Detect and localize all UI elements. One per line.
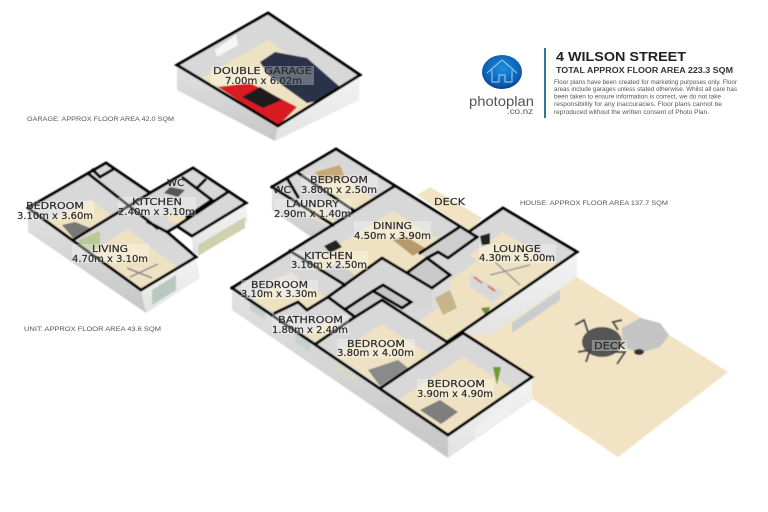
disclaimer text — [554, 79, 737, 116]
room: laundry and wc — [300, 205, 338, 226]
plant — [493, 367, 501, 385]
label: laundry: 2.90m x 1.40m — [274, 209, 351, 220]
label: laundry — [274, 199, 351, 220]
house wall lines — [232, 149, 577, 435]
label: kitchen: KITCHEN — [304, 251, 353, 262]
unit bedroom floor — [48, 199, 112, 240]
car: red — [218, 83, 297, 126]
house exterior walls — [232, 187, 577, 458]
fireplace — [435, 290, 457, 315]
label: bedroom left: BEDROOM — [251, 280, 308, 291]
dining table — [393, 236, 425, 256]
label: unit kitchen: KITCHEN — [132, 197, 182, 208]
title block: TOTAL APPROX FLOOR AREA 223.3 SQM — [556, 65, 733, 75]
label: side deck: DECK — [594, 341, 625, 352]
unit windows — [152, 275, 176, 305]
label: top bedroom: 3.80m x 2.50m — [301, 185, 377, 196]
room: lounge — [419, 232, 558, 340]
label: top bedroom — [301, 175, 378, 196]
label: lounge — [479, 244, 556, 264]
label: bedroom lower right — [417, 379, 494, 400]
bed — [368, 360, 408, 386]
icon: house in blue circle — [482, 55, 522, 89]
label: bedroom centre: 3.80m x 4.00m — [337, 348, 414, 359]
lounge rug — [490, 262, 530, 285]
label: house wc: WC — [273, 185, 291, 196]
disclaimer text: been taken to ensure information is correct, we do not take — [554, 94, 722, 100]
label: unit living — [72, 244, 149, 265]
garage window — [215, 35, 238, 57]
unit living floor — [92, 229, 178, 289]
label: rear deck: DECK — [434, 197, 465, 208]
title block: 4 WILSON STREET — [556, 49, 686, 64]
label: double garage — [211, 66, 314, 87]
disclaimer text: responsibility for any inaccuracies. Floor plans cannot be — [554, 101, 723, 108]
label: unit wc: WC — [167, 178, 184, 189]
label: lounge: LOUNGE — [493, 244, 541, 255]
label: bedroom lower right: BEDROOM — [427, 379, 485, 390]
label: bedroom centre: BEDROOM — [347, 339, 405, 350]
house wall windows — [250, 302, 265, 320]
hob — [324, 240, 342, 253]
label: top bedroom: BEDROOM — [310, 175, 368, 186]
label: bathroom: 1.80m x 2.40m — [272, 325, 348, 336]
label: unit kitchen — [118, 197, 196, 218]
title block — [554, 49, 737, 116]
label: unit kitchen: 2.40m x 3.10m — [118, 207, 195, 218]
label: laundry: LAUNDRY — [286, 199, 340, 210]
label: kitchen: 3.10m x 2.50m — [291, 260, 367, 271]
bed — [420, 400, 458, 424]
label: bedroom left: 3.10m x 3.30m — [241, 289, 317, 300]
deck furniture: table chairs and umbrella — [575, 318, 669, 364]
room: bathroom — [296, 322, 336, 343]
garage 3D room — [177, 13, 360, 153]
label: bedroom centre — [337, 339, 415, 359]
label: bathroom — [272, 315, 349, 336]
label: double garage: 7.00m x 6.02m — [225, 76, 302, 87]
label: unit living: LIVING — [92, 244, 128, 255]
unit kitchen floor — [165, 212, 187, 224]
room: bedroom lower right — [400, 357, 512, 434]
note: garage floor area: GARAGE: APPROX FLOOR AREA 42.0 SQM — [27, 116, 174, 123]
note: unit floor area: UNIT: APPROX FLOOR AREA 43.6 SQM — [24, 326, 161, 333]
label: unit bedroom — [17, 201, 94, 222]
logo: photoplan — [469, 55, 534, 116]
room: bedroom left — [252, 272, 325, 313]
disclaimer text: reproduced without the written consent of Photo Plan. — [554, 109, 709, 116]
logo: photoplan: photoplan — [469, 93, 534, 109]
label: unit living: 4.70m x 3.10m — [72, 254, 148, 265]
label: bathroom: BATHROOM — [278, 315, 343, 326]
label: dining — [354, 221, 431, 242]
label: dining: DINING — [373, 221, 412, 232]
drawing: all floor plan artwork — [28, 13, 728, 459]
unit 3D block — [28, 163, 248, 314]
room: top bedroom — [314, 164, 374, 210]
label: bedroom left — [241, 280, 318, 300]
corridor and closets — [328, 228, 477, 317]
car: dark blue — [260, 52, 340, 103]
label: bedroom lower right: 3.90m x 4.90m — [417, 389, 493, 400]
house top base — [232, 149, 577, 435]
lounge sofa — [470, 273, 505, 302]
label: dining: 4.50m x 3.90m — [354, 231, 431, 242]
tv — [480, 233, 490, 246]
deck: rear and side decking — [417, 187, 728, 457]
room labels — [17, 66, 627, 400]
note: house floor area: HOUSE: APPROX FLOOR AREA 137.7 SQM — [520, 200, 668, 207]
disclaimer text: Floor plans have been created for marketing purposes only. Floor — [554, 79, 737, 86]
label: lounge: 4.30m x 5.00m — [479, 253, 555, 264]
label: double garage: DOUBLE GARAGE — [213, 66, 312, 77]
label: unit bedroom: BEDROOM — [26, 201, 84, 212]
kitchen counter — [320, 262, 355, 284]
label: unit bedroom: 3.10m x 3.60m — [17, 211, 93, 222]
label: kitchen — [291, 251, 368, 271]
logo: photoplan: .co.nz — [507, 106, 533, 116]
room: dining and kitchen — [312, 211, 439, 282]
disclaimer text: areas include garages unless stated otherwise. Whilst all care has — [554, 86, 737, 93]
room: bedroom centre — [335, 324, 430, 387]
divider — [544, 48, 546, 118]
